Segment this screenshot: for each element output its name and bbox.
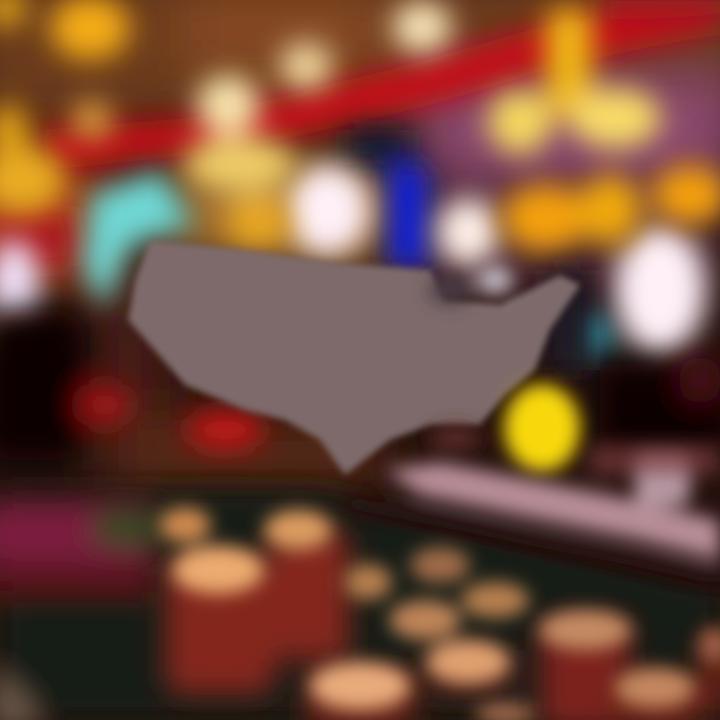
ceiling backdrop xyxy=(0,0,720,490)
golden chandeliers xyxy=(0,0,720,252)
red ceiling band xyxy=(0,0,720,270)
map of the United States xyxy=(128,240,580,475)
chip stacks xyxy=(165,530,720,720)
map shading: great lakes region xyxy=(428,266,513,450)
teal and blue light panels xyxy=(82,130,614,357)
yellow coin light xyxy=(504,384,580,472)
white lights xyxy=(0,164,706,362)
dark lower-left and right shadows xyxy=(0,270,720,460)
bar counter xyxy=(350,445,720,585)
casino table xyxy=(0,490,720,720)
chip tops xyxy=(159,507,720,720)
